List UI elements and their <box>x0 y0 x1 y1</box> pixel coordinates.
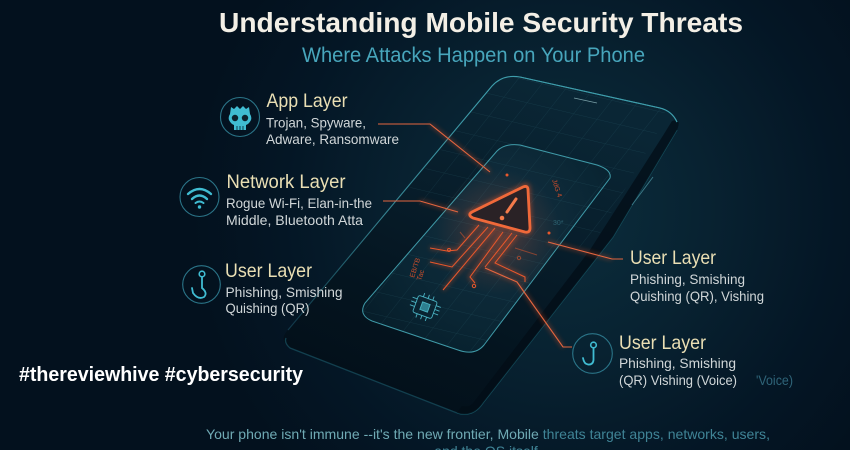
footer text: Your phone isn't immune --it's the new frontier, Mobile threats target apps, networks, users, <box>206 426 770 442</box>
small circuit labels: Tac <box>416 269 426 282</box>
panel: network layer <box>180 171 372 228</box>
threat list: Phishing, Smishing <box>630 271 745 287</box>
panel: user layer left <box>183 260 342 316</box>
circuit traces glow <box>420 124 612 347</box>
heading: Network Layer <box>226 171 346 193</box>
threat list: Quishing (QR), Vishing <box>630 288 764 304</box>
phone bottom edge <box>286 338 457 413</box>
panel: app layer <box>220 90 399 147</box>
heading: User Layer <box>619 332 706 354</box>
threat list <box>266 114 399 147</box>
threat list: Quishing (QR) <box>226 300 310 316</box>
phone back grid <box>400 76 665 250</box>
threat list <box>226 195 372 228</box>
subtitle: Where Attacks Happen on Your Phone <box>302 44 645 67</box>
warning glow <box>436 170 560 294</box>
panel: user layer lower right <box>573 332 793 388</box>
chip icon <box>406 290 444 324</box>
hashtags: #thereviewhive #cybersecurity <box>19 364 304 386</box>
speaker slot <box>574 98 597 103</box>
phone side band <box>457 120 679 414</box>
threat list <box>619 355 737 388</box>
small circuit labels: 30* <box>553 220 564 227</box>
heading: App Layer <box>266 90 348 112</box>
threat list <box>630 271 764 304</box>
phone side edge <box>457 130 677 414</box>
warning triangle icon <box>470 186 530 232</box>
small circuit labels: EB/TB <box>409 257 422 279</box>
phone body <box>283 76 678 414</box>
title: Understanding Mobile Security Threats <box>219 7 743 38</box>
heading: User Layer <box>630 247 716 269</box>
footer text <box>206 426 770 450</box>
threat list: Rogue Wi-Fi, Elan-in-the <box>226 195 372 211</box>
icon: hook <box>183 266 220 303</box>
icon: hook <box>573 334 612 373</box>
panel: user layer right <box>630 247 764 304</box>
user layer connector <box>548 242 623 259</box>
app layer connector <box>378 124 490 172</box>
phone screen <box>363 145 610 352</box>
threat list: Adware, Ransomware <box>266 131 399 147</box>
circuit traces <box>430 174 550 290</box>
icon: wifi <box>180 178 219 216</box>
small circuit labels <box>409 178 564 282</box>
small circuit labels: JdG 4 <box>550 178 563 198</box>
threat list: Phishing, Smishing <box>226 284 342 300</box>
side button <box>632 177 653 205</box>
icon: skull <box>220 98 260 136</box>
phone top edge <box>520 77 677 122</box>
lower user layer connector <box>485 268 572 347</box>
threat list <box>226 284 342 316</box>
threat list: (QR) Vishing (Voice) <box>619 372 737 388</box>
stray voice text: 'Voice) <box>756 372 793 388</box>
network layer connector <box>383 201 458 212</box>
threat list: Middle, Bluetooth Atta <box>226 212 363 228</box>
threat list: Trojan, Spyware, <box>266 114 366 130</box>
phone top and left highlight <box>288 76 677 330</box>
threat list: Phishing, Smishing <box>619 355 736 371</box>
screen grid <box>363 145 610 352</box>
phone illustration <box>283 76 679 414</box>
heading: User Layer <box>225 260 312 282</box>
